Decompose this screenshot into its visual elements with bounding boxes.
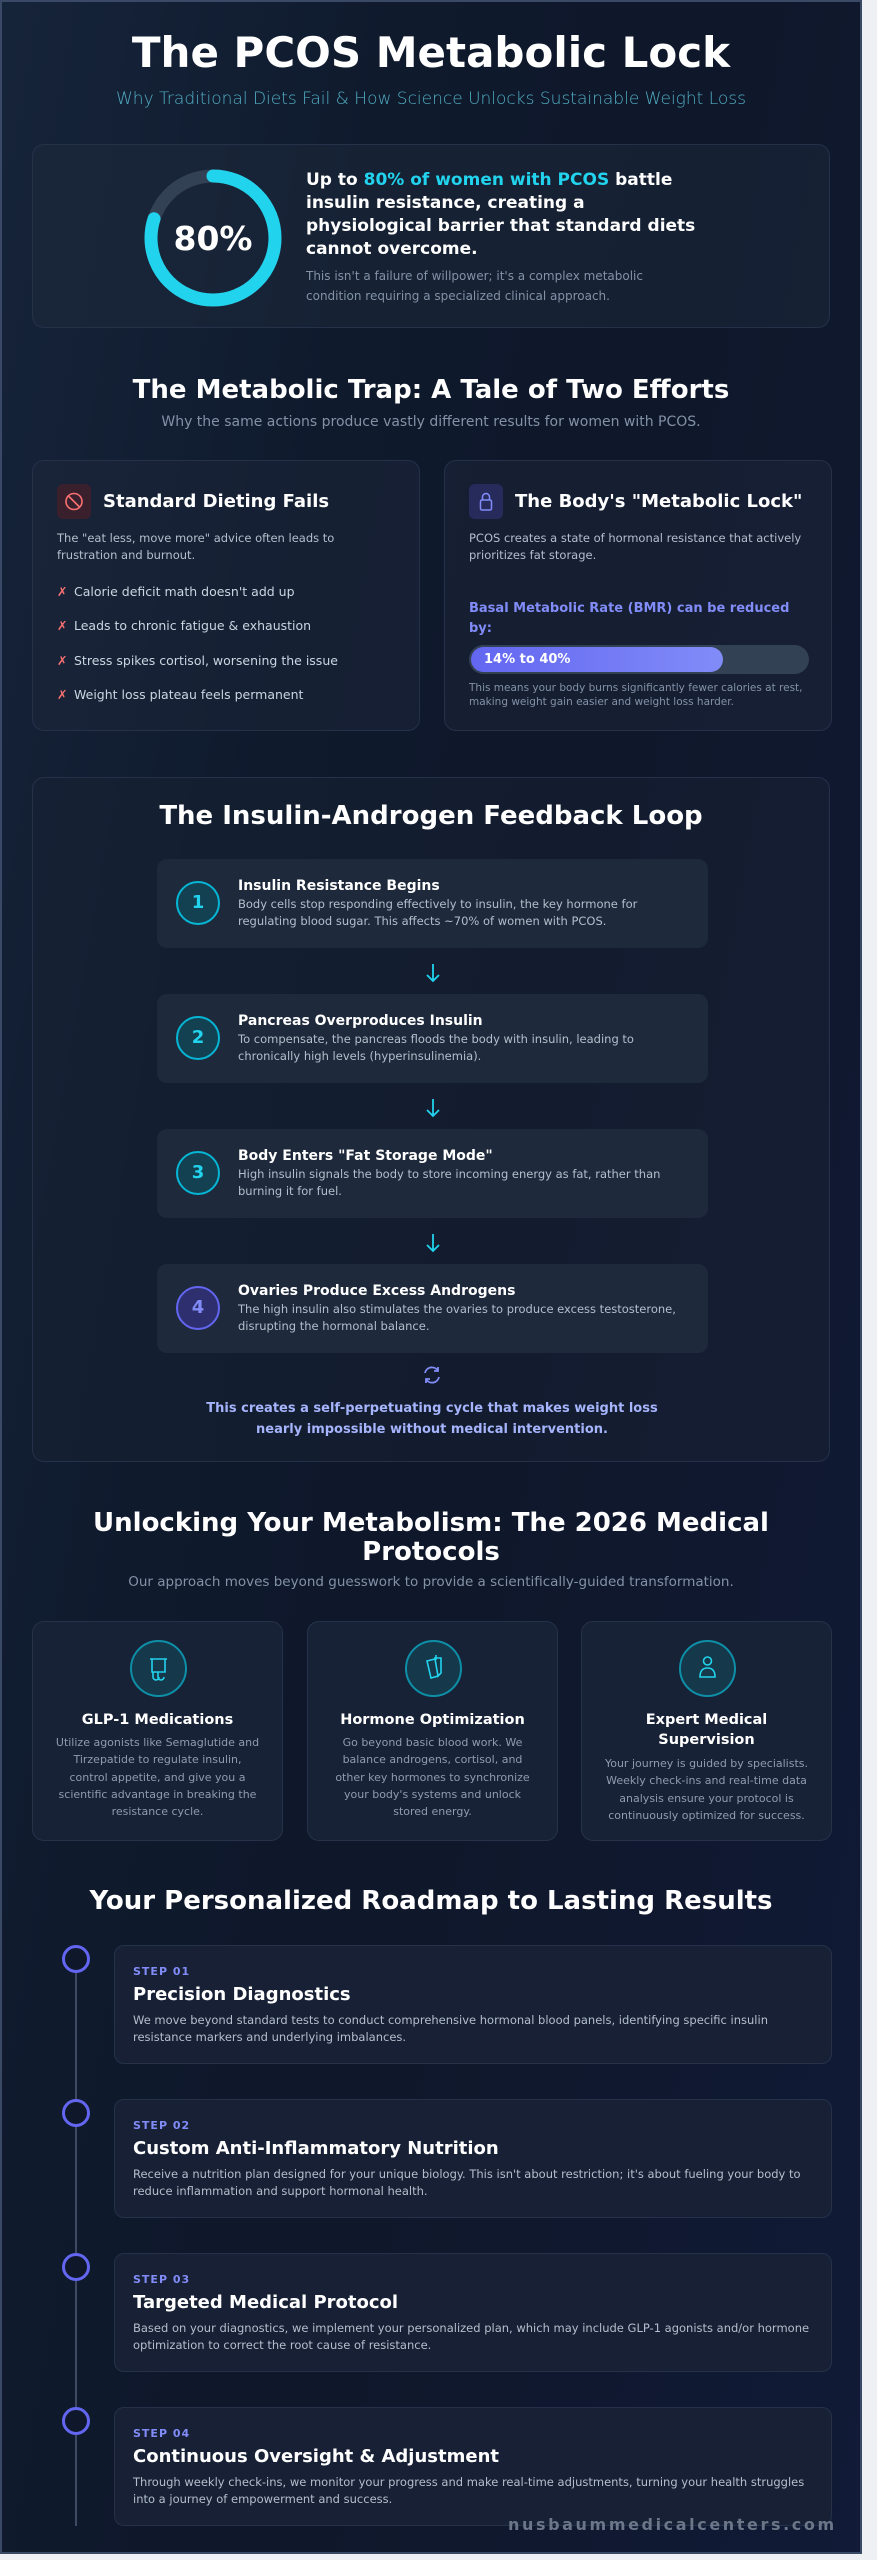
panel: GLP-1: Tirzepatide to regulate insulin, [73, 1753, 242, 1766]
icon: person [679, 1640, 736, 1697]
list: failures: Weight loss plateau feels permanent [74, 687, 303, 702]
step 3: 3 [192, 1162, 204, 1183]
list: failures [57, 584, 338, 702]
panel: expert supervision [581, 1621, 832, 1841]
panel: feedback loop [32, 777, 830, 1462]
panel: hormone optimization: Go beyond basic blood work. We [343, 1736, 522, 1749]
panel: hormone optimization: Hormone Optimization [340, 1712, 525, 1728]
heading: The Insulin-Androgen Feedback Loop [159, 801, 703, 831]
description: PCOS creates a state of hormonal resistance that actively prioritizes fat storage. [469, 531, 801, 562]
arrow [426, 1234, 440, 1252]
arrow [426, 1099, 440, 1118]
panel: GLP-1: scientific advantage in breaking the [59, 1788, 256, 1801]
panel: expert supervision: Expert Medical [646, 1712, 767, 1728]
label: BMR: Basal Metabolic Rate (BMR) can be reduced by: [469, 601, 789, 636]
panel: hormone optimization: stored energy. [393, 1805, 472, 1818]
roadmap step 2: Custom Anti-Inflammatory Nutrition [133, 2138, 499, 2159]
heading: roadmap: Your Personalized Roadmap to Lasting Results [89, 1886, 773, 1916]
icon: lock [469, 484, 503, 519]
list: failures: Calorie deficit math doesn't add up [74, 584, 295, 599]
card title: Standard Dieting Fails [103, 491, 329, 512]
roadmap step 3: STEP 03 [133, 2273, 190, 2286]
panel: expert supervision: analysis ensure your protocol is [619, 1792, 794, 1805]
step 4: The high insulin also stimulates the ovaries to produce excess testosterone, disrupting the hormonal balance. [238, 1302, 676, 1333]
step 1 [157, 859, 708, 948]
step 4: 4 [192, 1297, 204, 1318]
list: failures: Leads to chronic fatigue & exhaustion [74, 618, 311, 633]
panel: expert supervision: Weekly check-ins and real-time data [606, 1774, 807, 1787]
panel: stat card [32, 144, 830, 328]
step 3: Body Enters "Fat Storage Mode" [238, 1148, 493, 1164]
card title: The Body's "Metabolic Lock" [515, 491, 802, 512]
roadmap step 3: Targeted Medical Protocol [133, 2292, 398, 2313]
icon: cycle [424, 1366, 440, 1384]
roadmap step 3: Based on your diagnostics, we implement your personalized plan, which may include GLP-1 agonists and/or hormone optimization to correct the root cause of resistance. [133, 2321, 809, 2352]
watermark: nusbaummedicalcenters.com [508, 2515, 837, 2534]
text: stat note: This isn't a failure of willpower; it's a complex metabolic condition requiring a specialized clinical approach. [306, 269, 643, 303]
roadmap step 4: Continuous Oversight & Adjustment [133, 2446, 499, 2467]
panel: hormone optimization: balance androgens, cortisol, and [343, 1753, 522, 1766]
icon: medication [130, 1640, 187, 1697]
icon: prohibited [57, 484, 91, 519]
bar chart: BMR reduction [469, 645, 809, 674]
heading: metabolic trap: The Metabolic Trap: A Tale of Two Efforts [133, 375, 729, 405]
step 3 [157, 1129, 708, 1218]
panel: standard dieting fails [32, 460, 420, 731]
list: failures: Stress spikes cortisol, worsening the issue [74, 653, 338, 668]
callout: cycle: This creates a self-perpetuating cycle that makes weight loss nearly impossible without medical intervention. [206, 1401, 658, 1437]
roadmap step 1 [114, 1945, 832, 2064]
chart: 80% ring [144, 170, 282, 306]
panel: GLP-1: GLP-1 Medications [82, 1712, 233, 1728]
roadmap step 4 [114, 2407, 832, 2526]
step 2: Pancreas Overproduces Insulin [238, 1013, 483, 1029]
bar chart: BMR reduction: 14% to 40% [484, 652, 570, 667]
subheading: Why the same actions produce vastly different results for women with PCOS. [161, 414, 701, 430]
chart: 80% ring: 80% [174, 219, 252, 258]
timeline line [75, 1959, 77, 2526]
panel: expert supervision: continuously optimized for success. [608, 1809, 805, 1822]
roadmap step 1: STEP 01 [133, 1965, 190, 1978]
panel: expert supervision: Your journey is guided by specialists. [605, 1757, 808, 1770]
panel: GLP-1 [32, 1621, 283, 1841]
text: stat headline: Up to 80% of women with PCOS battle insulin resistance, creating a physiological barrier that standard diets cannot overcome. [306, 170, 695, 259]
arrow [426, 964, 440, 982]
description: The "eat less, move more" advice often leads to frustration and burnout. [57, 531, 334, 562]
list: failures: ✗ [57, 687, 67, 702]
list: failures: ✗ [57, 653, 67, 668]
panel: GLP-1: resistance cycle. [112, 1805, 203, 1818]
step 2: To compensate, the pancreas floods the body with insulin, leading to chronically high levels (hyperinsulinemia). [238, 1032, 634, 1063]
heading: protocols: Unlocking Your Metabolism: The 2026 Medical Protocols [93, 1508, 769, 1567]
panel: hormone optimization [307, 1621, 558, 1841]
roadmap step 4: Through weekly check-ins, we monitor your progress and make real-time adjustments, turning your health struggles into a journey of empowerment and success. [133, 2475, 804, 2506]
step 4: Ovaries Produce Excess Androgens [238, 1283, 515, 1299]
list: failures: ✗ [57, 618, 67, 633]
icon: hormone [405, 1640, 462, 1697]
roadmap step 3 [114, 2253, 832, 2372]
panel: hormone optimization: other key hormones to synchronize [335, 1771, 530, 1784]
step 1: Body cells stop responding effectively to insulin, the key hormone for regulating blood sugar. This affects ~70% of women with PCOS. [238, 897, 637, 928]
roadmap step 1: We move beyond standard tests to conduct comprehensive hormonal blood panels, identifying specific insulin resistance markers and underlying imbalances. [133, 2013, 768, 2044]
step 2: 2 [192, 1027, 204, 1048]
panel: hormone optimization: your body's systems and unlock [344, 1788, 521, 1801]
step 3: High insulin signals the body to store incoming energy as fat, rather than burning it for fuel. [238, 1167, 660, 1198]
panel: metabolic lock [444, 460, 832, 731]
step 2 [157, 994, 708, 1083]
step 4 [157, 1264, 708, 1353]
roadmap step 4: STEP 04 [133, 2427, 190, 2440]
panel: expert supervision: Supervision [658, 1732, 755, 1748]
timeline dots [62, 1945, 90, 2435]
panel: GLP-1: control appetite, and give you a [70, 1771, 246, 1784]
panel: GLP-1: Utilize agonists like Semaglutide and [56, 1736, 259, 1749]
subtitle: Why Traditional Diets Fail & How Science Unlocks Sustainable Weight Loss [116, 89, 746, 109]
list: failures: ✗ [57, 584, 67, 599]
roadmap step 2 [114, 2099, 832, 2218]
roadmap step 2: Receive a nutrition plan designed for your unique biology. This isn't about restriction; it's about fueling your body to reduce inflammation and support hormonal health. [133, 2167, 801, 2198]
roadmap step 2: STEP 02 [133, 2119, 190, 2132]
roadmap step 1: Precision Diagnostics [133, 1984, 351, 2005]
title: The PCOS Metabolic Lock [132, 28, 730, 77]
step 1: 1 [192, 892, 204, 913]
note: This means your body burns significantly fewer calories at rest, making weight gain easier and weight loss harder. [469, 682, 803, 708]
subheading: Our approach moves beyond guesswork to provide a scientifically-guided transformation. [128, 1574, 734, 1590]
step 1: Insulin Resistance Begins [238, 878, 440, 894]
